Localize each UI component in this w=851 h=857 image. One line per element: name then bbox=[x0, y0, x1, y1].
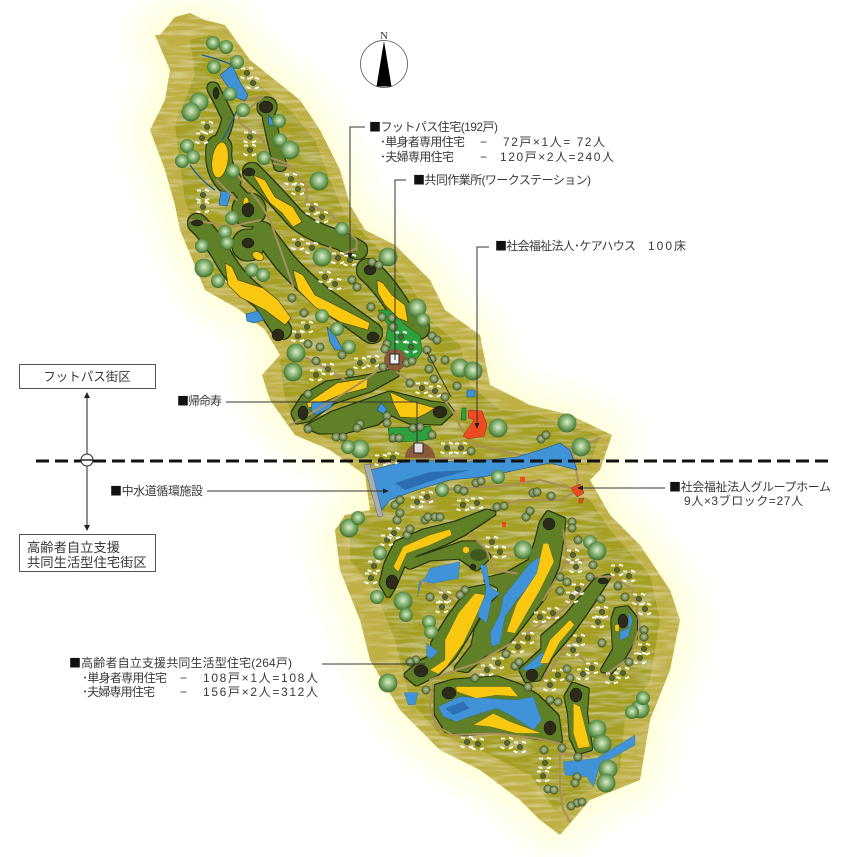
district boundary dashed line bbox=[36, 460, 828, 462]
district arrow bbox=[81, 392, 93, 531]
callout: footpath housing: − bbox=[480, 150, 487, 164]
reservoir deep water bbox=[395, 470, 470, 490]
group home building bbox=[571, 484, 584, 503]
callout: kimeiju: ■帰命寿 bbox=[177, 392, 222, 409]
central roads bbox=[290, 352, 600, 530]
callout: workstation bbox=[395, 171, 591, 360]
north sand bunkers bbox=[210, 141, 435, 418]
callout: independent living housing: 156戸×2人=312人 bbox=[203, 685, 318, 699]
callout: care house: ■社会福祉法人･ケアハウス bbox=[495, 237, 636, 254]
care house building bbox=[463, 410, 487, 439]
north golf fairways bbox=[197, 88, 452, 432]
callout: water recycling facility bbox=[110, 482, 389, 499]
callout: footpath housing: 120戸×2人=240人 bbox=[500, 150, 614, 164]
callout: independent living housing: ■高齢者自立支援共同生活型住宅(264戸) bbox=[69, 654, 292, 671]
small red facilities bbox=[502, 477, 525, 527]
south golf fairways bbox=[382, 512, 635, 752]
callout: footpath housing: − bbox=[480, 135, 487, 149]
callout: workstation: ■共同作業所(ワークステーション) bbox=[413, 171, 591, 188]
callout: independent living housing: − bbox=[180, 685, 187, 699]
south ponds and sand bunkers bbox=[393, 529, 635, 787]
callout: footpath housing: ･夫婦専用住宅 bbox=[380, 149, 454, 164]
kimeiju building bbox=[405, 443, 435, 458]
callout: footpath housing: ■フットパス住宅(192戸) bbox=[369, 118, 498, 135]
callout: kimeiju bbox=[177, 392, 417, 443]
compass: N bbox=[380, 30, 388, 42]
south roads bbox=[420, 530, 640, 822]
callout: independent living housing: ･単身者専用住宅 bbox=[82, 670, 167, 685]
callout: group home bbox=[577, 478, 831, 508]
reservoir bbox=[370, 443, 577, 510]
callout: group home: ■社会福祉法人グループホーム bbox=[669, 478, 831, 495]
callout: footpath housing: ･単身者専用住宅 bbox=[380, 134, 465, 149]
callout: footpath housing bbox=[348, 118, 614, 259]
north roads bbox=[190, 97, 357, 287]
callout: group home: 9人×3ブロック=27人 bbox=[684, 493, 803, 508]
callout: care house bbox=[427, 237, 686, 429]
housing units bbox=[196, 68, 651, 782]
callout: independent living housing: 108戸×1人=108人 bbox=[203, 671, 318, 685]
water stream bbox=[190, 55, 237, 190]
trees bbox=[175, 36, 650, 810]
background glow bbox=[150, 13, 680, 835]
compass bbox=[360, 30, 408, 88]
box: independent living district: 高齢者自立支援 bbox=[27, 539, 120, 555]
box: independent living district bbox=[20, 534, 156, 572]
callout: independent living housing: ･夫婦専用住宅 bbox=[82, 684, 155, 699]
box: footpath district bbox=[20, 364, 156, 388]
ponds north bbox=[219, 65, 475, 415]
callout: care house: 100床 bbox=[648, 239, 686, 253]
callout: independent living housing: − bbox=[180, 671, 187, 685]
land terrain bbox=[150, 13, 680, 835]
dam bbox=[364, 464, 383, 517]
bright green lawns bbox=[378, 310, 466, 442]
callout: independent living housing bbox=[69, 654, 425, 699]
dark bunker groups bbox=[191, 87, 628, 735]
box: independent living district: 共同生活型住宅街区 bbox=[27, 555, 147, 570]
callout: water recycling facility: ■中水道循環施設 bbox=[110, 482, 203, 499]
workstation building bbox=[384, 349, 406, 371]
box: footpath district: フットパス街区 bbox=[43, 370, 131, 384]
callout: footpath housing: 72戸×1人= 72人 bbox=[503, 135, 605, 149]
